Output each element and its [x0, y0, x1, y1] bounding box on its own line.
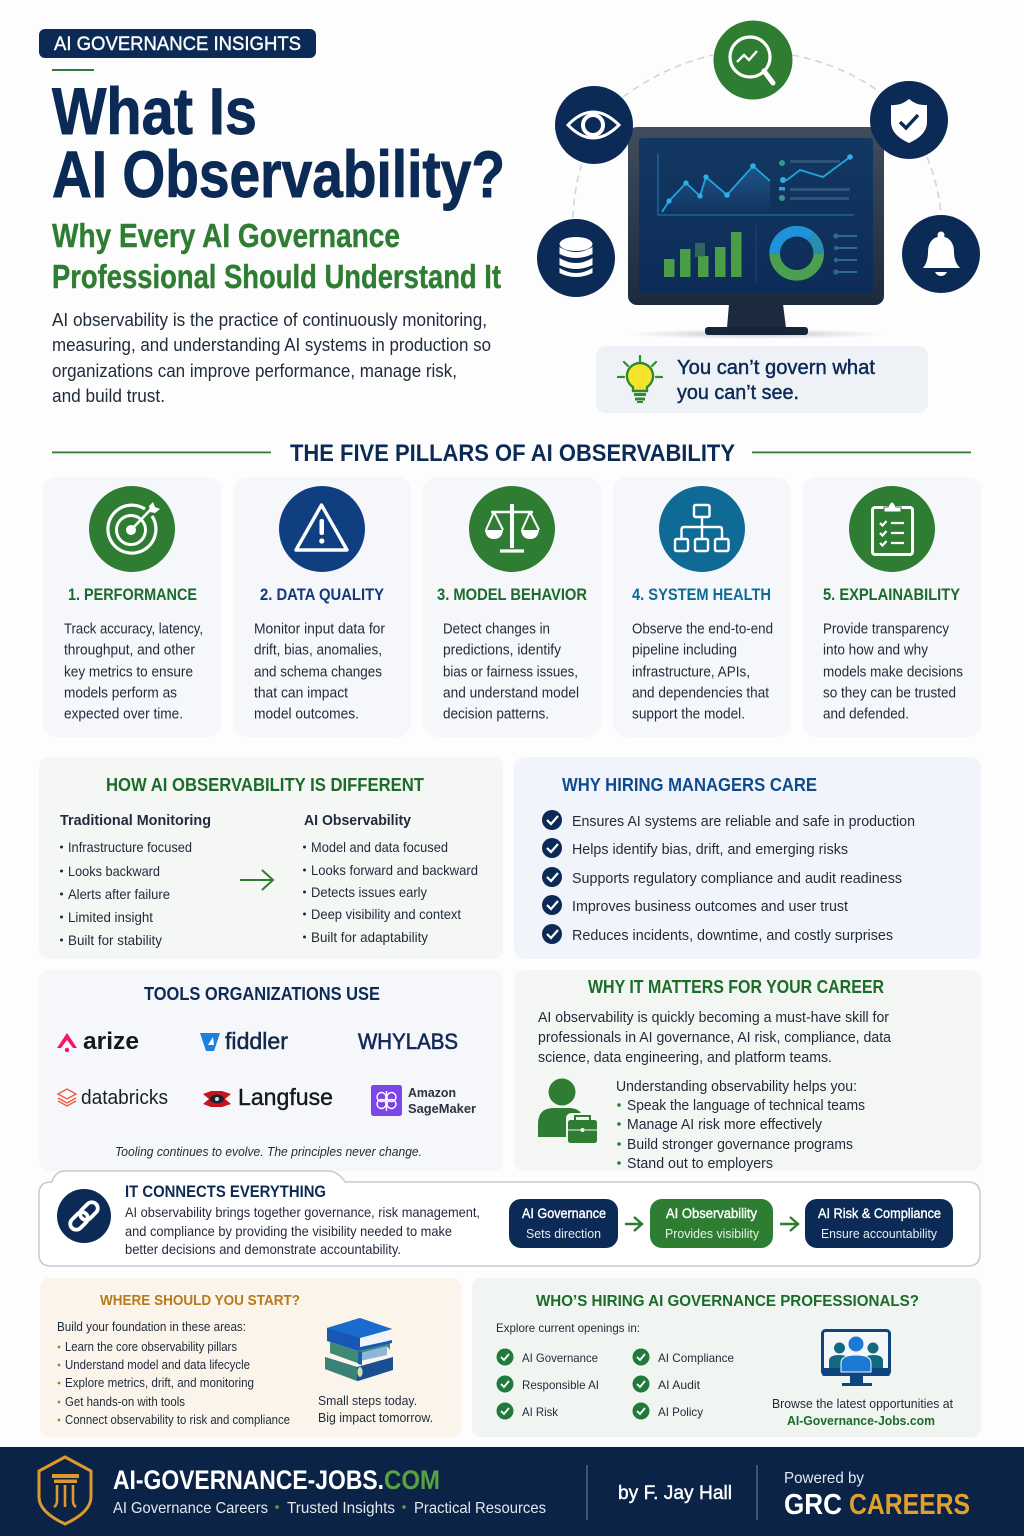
- panel: who's hiring: Explore current openings in:: [496, 1321, 640, 1335]
- intro paragraph: organizations can improve performance, manage risk,: [52, 360, 457, 381]
- title: AI Observability?: [52, 137, 505, 211]
- panel: pillar 2 data quality: and schema changes: [254, 664, 382, 680]
- panel: pillar 3 model behavior: 3. MODEL BEHAVIOR: [437, 586, 587, 604]
- icon: gold shield with pillar: [39, 1457, 91, 1524]
- panel: it connects everything: IT CONNECTS EVERYTHING: [125, 1183, 326, 1201]
- panel: where should you start: Understand model and data lifecycle: [65, 1358, 250, 1372]
- checklist: [542, 810, 915, 944]
- panel: pillar 5 explainability: Provide transparency: [823, 622, 950, 638]
- panel: pillar 2 data quality: that can impact: [254, 686, 348, 702]
- icon: shield: [870, 81, 948, 159]
- panel: pillar 2 data quality: model outcomes.: [254, 706, 359, 722]
- badge: AI Governance Insights: [39, 29, 316, 58]
- footer: [0, 1447, 1024, 1536]
- panel: pillar 3 model behavior: decision patterns.: [443, 706, 549, 722]
- donut chart: [775, 231, 819, 275]
- pill: AI Risk & Compliance: Ensure accountability: [821, 1226, 937, 1241]
- icon: person with briefcase: [538, 1078, 597, 1143]
- icon: monitor with people: [822, 1330, 890, 1386]
- job category checklist: [496, 1348, 734, 1420]
- panel: pillar 4 system health: support the model.: [632, 706, 745, 722]
- list: AI observability: Deep visibility and context: [311, 907, 461, 922]
- list: traditional monitoring: Infrastructure focused: [68, 840, 192, 855]
- panel: who's hiring: AI-Governance-Jobs.com: [787, 1414, 935, 1428]
- hero illustration: monitor with orbiting icons: [537, 20, 980, 339]
- pill: AI Governance: AI Governance: [522, 1206, 606, 1221]
- intro paragraph: AI observability is the practice of continuously monitoring,: [52, 309, 487, 330]
- list: career benefits: Manage AI risk more effectively: [627, 1117, 823, 1133]
- icon: stack of books: [325, 1318, 393, 1381]
- list: traditional monitoring: Traditional Monitoring: [60, 812, 211, 829]
- arrow: [780, 1217, 798, 1231]
- footer: Trusted Insights: [287, 1500, 395, 1517]
- checklist: Ensures AI systems are reliable and safe in production: [572, 813, 915, 830]
- panel: where should you start: Explore metrics, drift, and monitoring: [65, 1376, 254, 1390]
- panel: pillar 2 data quality: Monitor input data for: [254, 622, 385, 638]
- list: AI observability: Built for adaptability: [311, 930, 428, 945]
- panel: why it matters for your career: science, data engineering, and platform teams.: [538, 1050, 832, 1066]
- panel: why hiring managers care: WHY HIRING MANAGERS CARE: [562, 775, 817, 795]
- panel: who's hiring: [472, 1278, 981, 1437]
- title: [52, 74, 505, 211]
- monitor: [626, 127, 886, 339]
- logo: databricks: databricks: [81, 1087, 168, 1109]
- panel: it connects everything: [39, 1171, 980, 1266]
- list: career benefits: Build stronger governance programs: [627, 1137, 853, 1153]
- logo: Langfuse: Langfuse: [238, 1084, 333, 1110]
- job category checklist: AI Compliance: [658, 1351, 734, 1365]
- job category checklist: AI Governance: [522, 1351, 598, 1365]
- footer: Powered by: [784, 1470, 864, 1487]
- job category checklist: AI Policy: [658, 1405, 703, 1419]
- panel: pillar 5 explainability: 5. EXPLAINABILITY: [823, 586, 960, 604]
- pill: AI Observability: Provides visibility: [665, 1226, 759, 1241]
- panel: pillar 4 system health: [613, 477, 791, 737]
- panel: tools organizations use: [39, 970, 503, 1171]
- panel: pillar 1 performance: [43, 477, 221, 737]
- logo: Amazon SageMaker: [371, 1085, 476, 1116]
- callout: You can't govern what you can't see: [596, 346, 928, 413]
- panel: where should you start: [40, 1278, 461, 1437]
- logo: Amazon SageMaker: Amazon: [408, 1086, 456, 1100]
- panel: where should you start: Get hands-on with tools: [65, 1395, 185, 1409]
- icon: target: [89, 486, 175, 572]
- panel: where should you start: Learn the core observability pillars: [65, 1340, 237, 1354]
- footer: COM: [384, 1465, 440, 1495]
- logo: arize: [57, 1028, 139, 1055]
- footer: by F. Jay Hall: [618, 1483, 732, 1504]
- panel: why hiring managers care: [514, 757, 981, 959]
- subtitle: Why Every AI Governance: [52, 217, 400, 254]
- icon: clipboard checklist: [849, 486, 935, 572]
- subtitle: [52, 217, 501, 295]
- icon: bell: [902, 215, 980, 293]
- list: traditional monitoring: Limited insight: [68, 910, 153, 925]
- panel: where should you start: Build your foundation in these areas:: [57, 1320, 246, 1334]
- panel: pillar 1 performance: key metrics to ensure: [64, 664, 193, 680]
- checklist: Reduces incidents, downtime, and costly surprises: [572, 927, 893, 944]
- pill: AI Observability: AI Observability: [666, 1206, 757, 1221]
- dashed orbit arc: [573, 55, 941, 218]
- panel: pillar 1 performance: expected over time.: [64, 706, 183, 722]
- panel: pillar 4 system health: Observe the end-to-end: [632, 622, 773, 638]
- list: traditional monitoring: [60, 812, 211, 948]
- panel: how AI observability is different: [39, 757, 503, 959]
- panel: pillar 4 system health: 4. SYSTEM HEALTH: [632, 586, 771, 604]
- panel: pillar 3 model behavior: Detect changes in: [443, 622, 550, 638]
- panel: pillar 1 performance: Track accuracy, latency,: [64, 622, 203, 638]
- checklist: Improves business outcomes and user trust: [572, 898, 849, 915]
- panel: why it matters for your career: WHY IT MATTERS FOR YOUR CAREER: [588, 977, 884, 997]
- bar chart: [664, 232, 742, 277]
- panel: why it matters for your career: professionals in AI governance, AI risk, compliance, data: [538, 1030, 892, 1046]
- panel: pillar 3 model behavior: predictions, identify: [443, 642, 562, 658]
- icon: database: [537, 219, 615, 297]
- icon: warning triangle: [279, 486, 365, 572]
- icon: hierarchy: [659, 486, 745, 572]
- donut legend: [833, 233, 857, 275]
- job category checklist: AI Risk: [522, 1405, 559, 1419]
- subtitle: Professional Should Understand It: [52, 258, 501, 295]
- icon: scales: [469, 486, 555, 572]
- panel: pillar 4 system health: infrastructure, APIs,: [632, 664, 750, 680]
- footer: AI-GOVERNANCE-JOBS.: [113, 1465, 384, 1495]
- intro paragraph: and build trust.: [52, 385, 165, 406]
- panel: pillar 4 system health: pipeline including: [632, 642, 737, 658]
- panel: pillar 1 performance: throughput, and other: [64, 642, 195, 658]
- intro paragraph: measuring, and understanding AI systems in production so: [52, 334, 491, 355]
- arrow: [625, 1217, 642, 1231]
- metric lines: [779, 154, 853, 201]
- panel: how AI observability is different: HOW AI OBSERVABILITY IS DIFFERENT: [106, 775, 424, 795]
- checklist: Supports regulatory compliance and audit readiness: [572, 870, 902, 887]
- panel: where should you start: Connect observability to risk and compliance: [65, 1413, 290, 1427]
- badge: AI Governance Insights: AI GOVERNANCE INSIGHTS: [54, 34, 301, 55]
- panel: tools organizations use: Tooling continues to evolve. The principles never change.: [115, 1145, 422, 1159]
- panel: where should you start: WHERE SHOULD YOU START?: [100, 1293, 300, 1309]
- footer: GRC: [784, 1489, 842, 1521]
- pill: AI Risk & Compliance: AI Risk & Compliance: [818, 1206, 941, 1221]
- logo: fiddler: fiddler: [225, 1028, 288, 1054]
- panel: pillar 2 data quality: [233, 477, 411, 737]
- panel: where should you start: Big impact tomorrow.: [318, 1411, 433, 1425]
- list: AI observability: Looks forward and backward: [311, 863, 478, 878]
- panel: who's hiring: Browse the latest opportunities at: [772, 1397, 954, 1411]
- list: AI observability: Model and data focused: [311, 840, 448, 855]
- logo: WhyLabs: WHYLABS: [358, 1029, 458, 1054]
- list: career benefits: [616, 1079, 865, 1172]
- job category checklist: AI Audit: [658, 1378, 701, 1392]
- panel: why it matters for your career: AI observability is quickly becoming a must-have skill for: [538, 1010, 889, 1026]
- icon: chain link: [57, 1189, 111, 1243]
- panel: pillar 1 performance: 1. PERFORMANCE: [68, 586, 197, 604]
- pill: AI Governance: [509, 1199, 618, 1248]
- line chart: [658, 154, 854, 215]
- panel: pillar 5 explainability: [803, 477, 981, 737]
- list: career benefits: Stand out to employers: [627, 1156, 773, 1172]
- footer: AI Governance Careers: [113, 1500, 268, 1517]
- panel: pillar 5 explainability: and defended.: [823, 706, 909, 722]
- panel: tools organizations use: TOOLS ORGANIZATIONS USE: [144, 984, 380, 1004]
- footer: Practical Resources: [414, 1500, 546, 1517]
- panel: pillar 3 model behavior: and understand model: [443, 686, 579, 702]
- panel: why it matters for your career: [514, 970, 981, 1172]
- list: traditional monitoring: Built for stability: [68, 933, 162, 948]
- pill: AI Observability: [650, 1199, 773, 1248]
- panel: pillar 1 performance: models perform as: [64, 686, 177, 702]
- panel: pillar 5 explainability: into how and why: [823, 642, 929, 658]
- list: traditional monitoring: Looks backward: [68, 864, 160, 879]
- section heading: five pillars: THE FIVE PILLARS OF AI OBSERVABILITY: [290, 440, 735, 467]
- intro paragraph: [52, 309, 491, 406]
- panel: pillar 5 explainability: models make decisions: [823, 664, 963, 680]
- list: traditional monitoring: Alerts after failure: [68, 887, 170, 902]
- logo: arize: arize: [83, 1028, 139, 1055]
- list: AI observability: Detects issues early: [311, 885, 427, 900]
- panel: pillar 4 system health: and dependencies that: [632, 686, 769, 702]
- checklist: Helps identify bias, drift, and emerging risks: [572, 841, 848, 858]
- logo: Amazon SageMaker: SageMaker: [408, 1102, 476, 1116]
- list: AI observability: [303, 812, 478, 945]
- icon: light bulb: [618, 356, 662, 403]
- job category checklist: Responsible AI: [522, 1378, 599, 1392]
- list: AI observability: AI Observability: [304, 812, 412, 829]
- panel: it connects everything: and compliance by providing the visibility needed to make: [125, 1223, 452, 1239]
- list: career benefits: Speak the language of technical teams: [627, 1098, 865, 1114]
- pill: AI Risk & Compliance: [805, 1199, 953, 1248]
- panel: pillar 2 data quality: drift, bias, anomalies,: [254, 642, 382, 658]
- panel: pillar 5 explainability: so they can be trusted: [823, 686, 956, 702]
- panel: pillar 2 data quality: 2. DATA QUALITY: [260, 586, 384, 604]
- panel: where should you start: Small steps today.: [318, 1394, 417, 1408]
- title: What Is: [52, 74, 257, 148]
- icon: eye: [555, 86, 633, 164]
- panel: pillar 3 model behavior: [423, 477, 601, 737]
- icon: magnifier with trend: [714, 20, 792, 100]
- pill: AI Governance: Sets direction: [526, 1226, 601, 1241]
- callout: You can't govern what you can't see: You can’t govern what: [677, 356, 875, 379]
- callout: You can't govern what you can't see: you can’t see.: [677, 381, 799, 404]
- panel: it connects everything: better decisions and demonstrate accountability.: [125, 1241, 401, 1257]
- footer: CAREERS: [849, 1489, 970, 1521]
- panel: pillar 3 model behavior: bias or fairness issues,: [443, 664, 578, 680]
- panel: who's hiring: WHO’S HIRING AI GOVERNANCE PROFESSIONALS?: [536, 1293, 919, 1310]
- panel: it connects everything: AI observability brings together governance, risk management,: [125, 1204, 480, 1220]
- list: career benefits: Understanding observability helps you:: [616, 1079, 857, 1095]
- arrow: [240, 870, 273, 890]
